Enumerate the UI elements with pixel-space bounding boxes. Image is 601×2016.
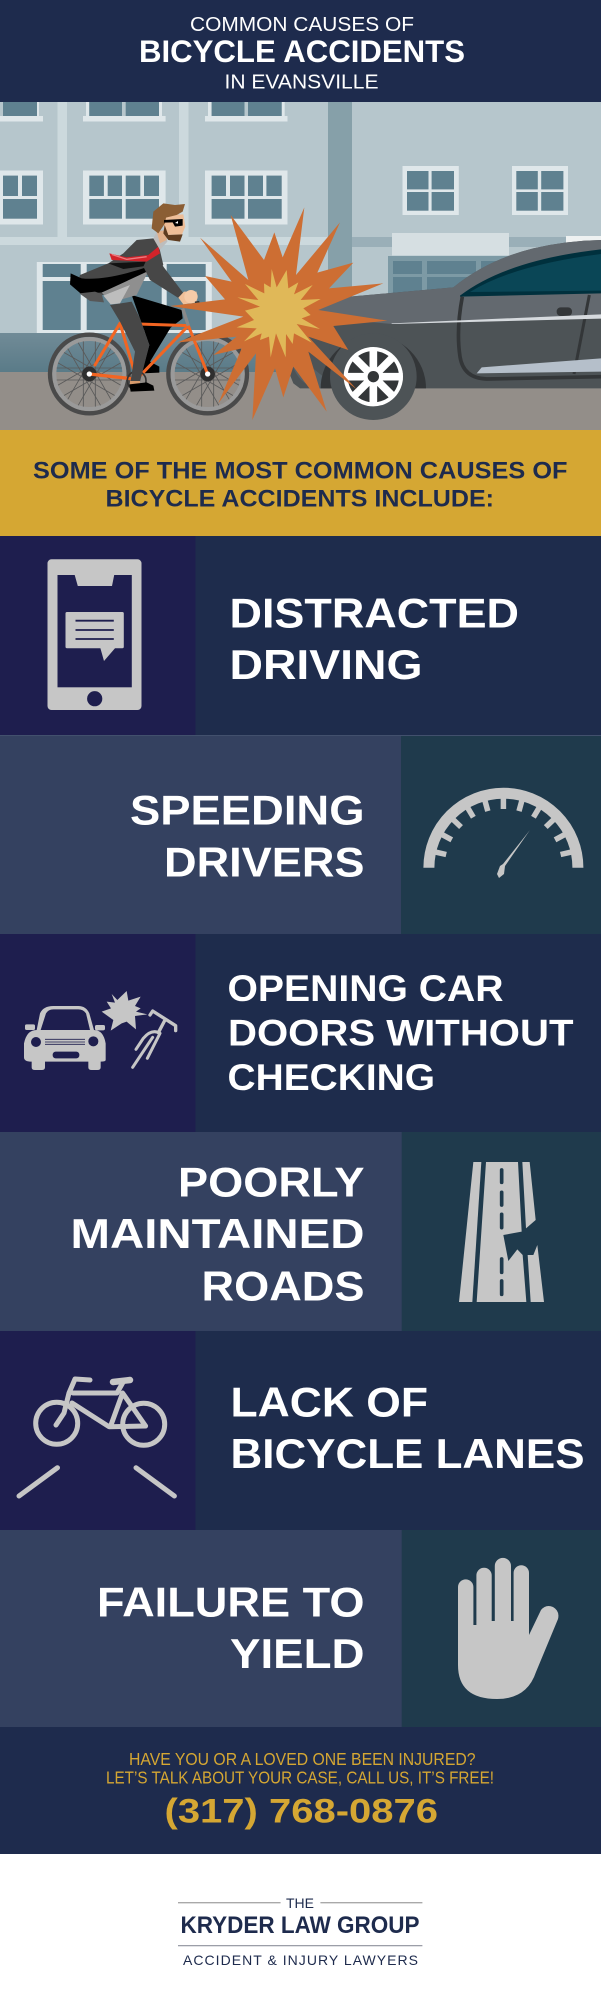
bicycle frame [89,323,208,379]
label: failure to yield: FAILURE TO [97,1579,364,1626]
label: failure to yield: YIELD [230,1630,364,1677]
CTA line 2: LET’S TALK ABOUT YOUR CASE, CALL US, IT’S FREE! [106,1767,494,1787]
explosion [170,207,387,420]
icon: car door and bicycle collision [24,991,176,1070]
label: failure to yield [97,1579,364,1677]
upper windows [0,102,568,333]
row 5: lack of bicycle lanes [0,1331,601,1530]
label: lack of bicycle lanes [230,1379,584,1477]
label: distracted driving: DRIVING [230,641,422,688]
header panel [0,0,601,102]
cyclist [50,203,247,413]
label: speeding drivers: SPEEDING [130,787,364,834]
label: speeding drivers: DRIVERS [164,839,364,886]
jacket [77,238,163,295]
front wheel [168,335,247,413]
label: poorly maintained roads: ROADS [202,1263,364,1310]
logo: The Kryder Law Group [178,1895,422,1968]
CTA line 1: HAVE YOU OR A LOVED ONE BEEN INJURED? [129,1749,476,1769]
logo: The Kryder Law Group: THE [286,1895,314,1911]
row 6: failure to yield [0,1530,601,1727]
label: distracted driving: DISTRACTED [230,590,519,637]
label: speeding drivers [130,787,364,886]
row 2: speeding drivers [0,735,601,934]
banner heading line 2: BICYCLE ACCIDENTS INCLUDE: [106,486,494,512]
icon: bicycle with lane lines [19,1379,174,1496]
title line 2: BICYCLE ACCIDENTS [139,33,465,69]
phone number: (317) 768-0876 [164,1793,438,1831]
label: poorly maintained roads [70,1159,364,1310]
car [280,240,601,420]
label: opening car doors without checking: OPENING CAR [228,968,504,1009]
logo: The Kryder Law Group: KRYDER LAW GROUP [180,1912,420,1939]
label: opening car doors without checking: CHECKING [228,1057,435,1098]
buildings background [0,102,601,372]
label: opening car doors without checking: DOORS WITHOUT [228,1013,574,1054]
road [0,372,601,430]
head [153,228,167,250]
rear wheel [50,335,129,413]
icon: smartphone with message [48,559,142,710]
illustration: street collision scene [0,102,601,430]
banner heading line 1: SOME OF THE MOST COMMON CAUSES OF [33,458,568,485]
label: distracted driving [230,590,519,688]
icon: damaged road [459,1162,544,1302]
label: poorly maintained roads: POORLY [178,1159,364,1206]
row 3: opening car doors [0,934,601,1132]
label: poorly maintained roads: MAINTAINED [70,1210,364,1257]
label: lack of bicycle lanes: BICYCLE LANES [230,1430,584,1477]
icon: raised hand [458,1558,558,1699]
front leg [110,302,149,382]
call to action panel [0,1727,601,1854]
gold banner [0,430,601,536]
label: opening car doors without checking [228,968,574,1098]
rear leg [132,295,183,373]
icon: speedometer [429,793,578,878]
label: lack of bicycle lanes: LACK OF [230,1379,428,1426]
logo: The Kryder Law Group: ACCIDENT & INJURY LAWYERS [183,1952,418,1968]
row 1: distracted driving [0,536,601,735]
row 4: poorly maintained roads [0,1132,601,1331]
title line 3: IN EVANSVILLE [224,72,378,94]
tie [109,247,160,262]
title line 1: COMMON CAUSES OF [190,14,414,36]
